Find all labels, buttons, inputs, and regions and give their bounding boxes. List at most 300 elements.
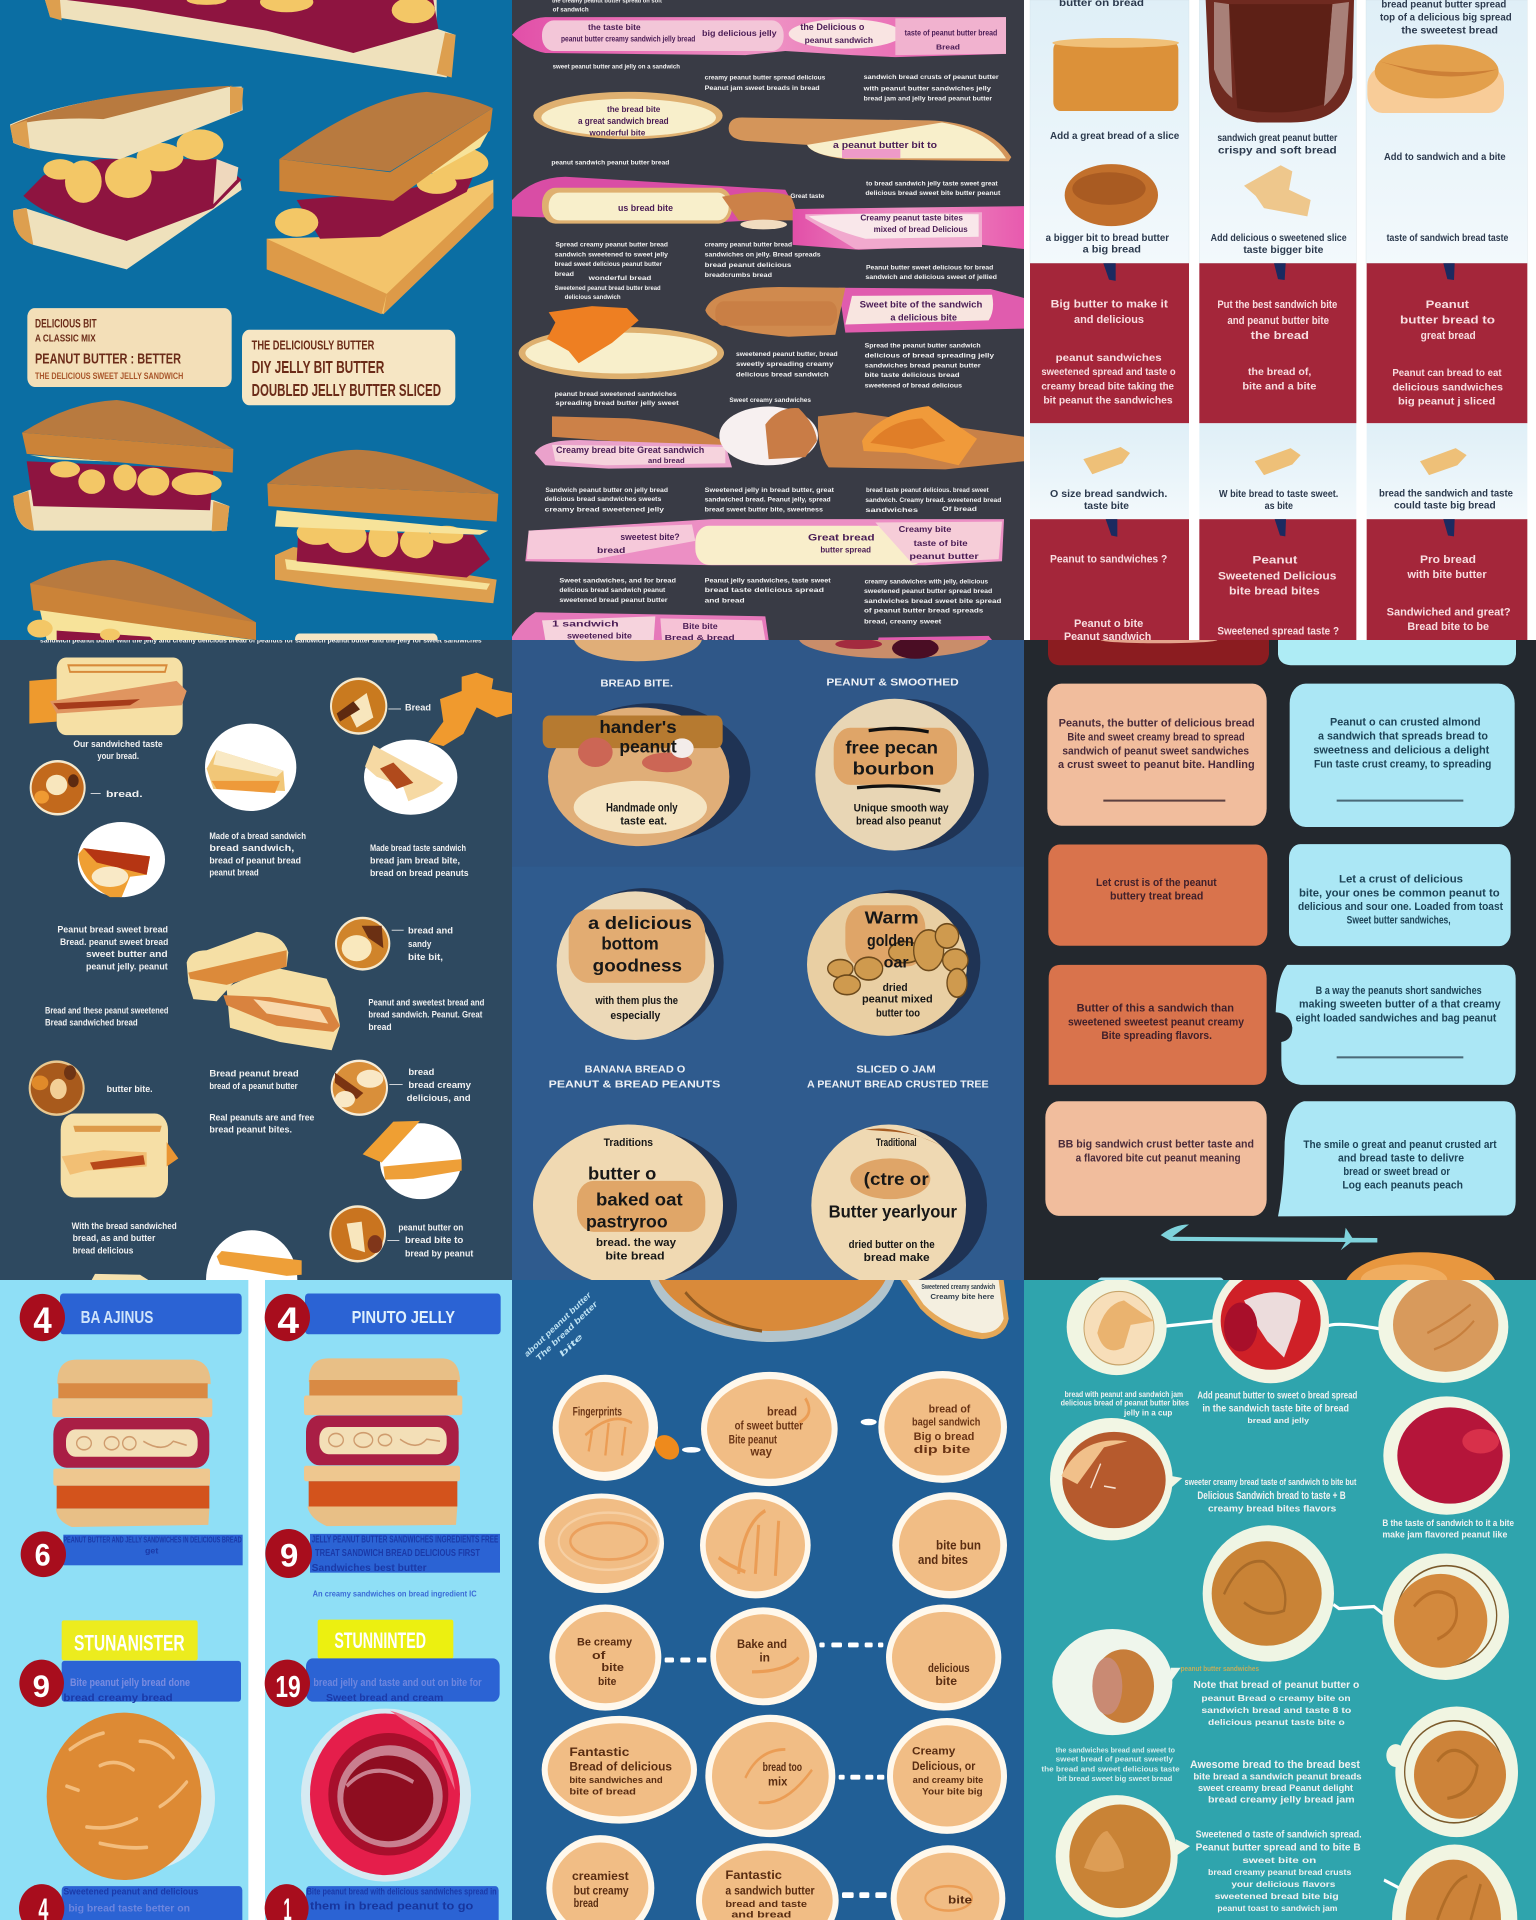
- sandwich: top open slice: [45, 0, 456, 78]
- blob: row one right: dip bite: [914, 1444, 971, 1456]
- blob: butter yearly: Butter yearlyour: [829, 1202, 958, 1222]
- ribbon: bottom: [512, 612, 769, 642]
- blob: row three left: [549, 1604, 661, 1711]
- blob: row three left: of: [592, 1650, 606, 1662]
- text: caption rows three: delicious sandwich: [565, 295, 621, 301]
- ribbon: sixth long: taste of bite: [914, 538, 968, 548]
- text: caption rows four: Spread the peanut butter sandwich: [865, 343, 981, 350]
- icon: spoon with label: [900, 1280, 1009, 1339]
- text: red panel copy: butter bread to: [1400, 315, 1495, 327]
- text: caption rows one: Peanut jam sweet breads in bread: [705, 85, 820, 92]
- blob: row four right: Delicious, or: [912, 1760, 976, 1773]
- icon: orange peanut: [652, 1430, 682, 1464]
- blob: row one middle: way: [749, 1446, 773, 1459]
- text: red panel copy: Peanut o bite: [1074, 618, 1144, 630]
- blob: row one right: Big o bread: [914, 1431, 974, 1443]
- ribbon: sixth long: butter spread: [820, 545, 871, 555]
- text: block five: [1193, 1679, 1360, 1727]
- blob: row two left: [539, 1493, 664, 1593]
- text: lower left copy: [72, 1221, 177, 1256]
- text: block six: [1041, 1747, 1180, 1783]
- blob: row five middle: and bread: [731, 1910, 791, 1920]
- blob: row five right: bite: [948, 1895, 972, 1907]
- text: caption rows five: [545, 487, 1002, 514]
- text: caption rows four: sweetened peanut butter, bread: [736, 352, 838, 358]
- text: column captions dark: taste bite: [1084, 500, 1129, 511]
- text: block two: Add peanut butter to sweet o bread spread: [1197, 1390, 1357, 1401]
- blob: row one left: Fingerprints: [573, 1406, 622, 1419]
- text: middle copy blocks: [45, 831, 484, 1135]
- icon: peanut butter chunk: [1065, 164, 1158, 226]
- heading: middle labels: BANANA BREAD O: [585, 1064, 685, 1075]
- connector: dashes four: [819, 1642, 883, 1647]
- card: terracotta three: Bite spreading flavors.: [1101, 1030, 1212, 1042]
- sandwich: left stack: [52, 1360, 212, 1527]
- card: top blue edge: [1278, 640, 1516, 665]
- card: peach four: [1045, 1101, 1267, 1216]
- bread: right slice with label: [729, 118, 1011, 161]
- label: left cream card: DELICIOUS BIT: [35, 317, 97, 331]
- card: terracotta three: sweetened sweetest peanut creamy: [1068, 1017, 1244, 1029]
- text: red panel copy: bite bread bites: [1229, 586, 1320, 598]
- card: terracotta two: [1048, 844, 1267, 946]
- text: block four: B the taste of sandwich to it a bite: [1382, 1518, 1514, 1528]
- ribbon: sixth long: Creamy bite: [899, 525, 951, 534]
- text: caption rows two: delicious bread sweet bite butter peanut: [865, 191, 1001, 197]
- step: header right: PINUTO JELLY: [352, 1308, 455, 1327]
- text: middle copy blocks: bread sandwich. Peanut. Great: [368, 1010, 483, 1020]
- text: middle copy blocks: Bread sandwiched bread: [45, 1018, 138, 1028]
- text: caption rows three: sandwiches on jelly. Bread spreads: [705, 252, 821, 259]
- blob: free pecan: free pecan: [845, 738, 938, 758]
- ribbon: crusts and meat: Creamy bread bite Great sandwich: [556, 444, 704, 455]
- text: column captions dark: taste of sandwich bread taste: [1387, 232, 1508, 243]
- text: caption rows six: and bread: [705, 598, 746, 605]
- blob: peanut butter with toast: taste eat.: [620, 816, 667, 828]
- text: caption rows five: sandwiches: [865, 507, 918, 514]
- text: block five: delicious peanut taste bite o: [1208, 1717, 1345, 1727]
- plate: peanut butter ring lower right: [1386, 1707, 1518, 1837]
- ribbon: bottom right edge: [878, 636, 992, 640]
- text: block three: creamy bread bites flavors: [1208, 1504, 1337, 1514]
- text: caption rows one: with peanut butter sandwiches jelly: [862, 86, 992, 93]
- text: rotated note: bite: [558, 1331, 585, 1359]
- text: middle copy blocks: Bread. peanut sweet bread: [60, 937, 168, 947]
- blob: row three left: Be creamy: [577, 1637, 632, 1649]
- heading: middle labels: SLICED O JAM: [856, 1064, 936, 1075]
- panel: slate sandwich diagram: [0, 638, 512, 1280]
- step: header left: BA AJINUS: [81, 1308, 153, 1327]
- text: caption rows five: creamy bread sweetened jelly: [545, 507, 665, 514]
- text: caption rows three: Spread creamy peanut butter bread: [555, 242, 669, 249]
- text: caption rows six: sweetened bread peanut butter: [559, 598, 669, 604]
- sandwich: centre pair: [187, 932, 340, 1050]
- plate: peanut butter centre: [1203, 1525, 1334, 1662]
- text: block eight: Sweetened o taste of sandwich spread.: [1196, 1829, 1362, 1840]
- sandwich: lower right: [267, 450, 498, 603]
- text: caption rows four: Sweet creamy sandwiches: [729, 398, 811, 404]
- text: side label three: bite bit,: [408, 952, 443, 962]
- column: left: [1030, 0, 1189, 640]
- text: side label three: [392, 926, 453, 962]
- text: block one: bread with peanut and sandwich jam: [1065, 1389, 1183, 1399]
- blob: row one left: [553, 1375, 658, 1481]
- text: column captions dark: a bigger bit to bread butter: [1046, 232, 1170, 243]
- text: caption rows three: bread: [555, 272, 575, 278]
- text: column captions dark: top of a delicious big spread: [1380, 12, 1512, 23]
- text: column captions dark: Add to sandwich and a bite: [1384, 151, 1506, 162]
- step: bottom left: big bread taste better on: [68, 1903, 190, 1914]
- text: lower left copy: bread, as and butter: [73, 1234, 156, 1243]
- text: red panel copy: Peanut: [1426, 299, 1470, 311]
- text: red panel copy: Sweetened Delicious: [1218, 571, 1336, 583]
- text: side label five: delicious, and: [407, 1093, 471, 1103]
- ribbon: right fourth: mixed of bread Delicious: [874, 224, 968, 234]
- icon: spoon with label: Sweetened creamy sandwich: [921, 1284, 995, 1291]
- ribbon: first: the taste bite: [588, 23, 641, 32]
- step: row three left: 9: [33, 1670, 50, 1705]
- panel: sky blue steps: [0, 1280, 512, 1920]
- text: red panel copy: Peanut sandwich: [1064, 631, 1151, 643]
- sandwich: bottom stub: [92, 1274, 148, 1280]
- ribbon: third with bread: us bread bite: [618, 202, 673, 213]
- text: caption rows three: creamy peanut butter bread: [705, 242, 793, 249]
- icon: chocolate jar: [1206, 0, 1354, 122]
- blob: row three right: bite: [935, 1675, 957, 1688]
- text: caption rows one: [553, 64, 1000, 103]
- text: caption rows four: delicious bread sandwich: [736, 372, 829, 379]
- text: block five: sandwich bread and taste 8 to: [1201, 1705, 1352, 1715]
- blob: row five right: [891, 1845, 1005, 1920]
- label: yellow left: STUNANISTER: [74, 1632, 185, 1656]
- text: middle copy blocks: Made bread taste sandwich: [370, 843, 466, 853]
- text: caption rows five: delicious bread sandwiches sweets: [545, 497, 661, 503]
- text: block two: [1197, 1390, 1357, 1425]
- ribbon: first: [512, 17, 1006, 57]
- ribbon: right fourth: [793, 206, 1024, 250]
- panel: blue peanut butter flow: [512, 1280, 1024, 1920]
- text: middle copy blocks: Made of a bread sandwich: [209, 831, 306, 841]
- text: middle copy blocks: bread on bread peanuts: [370, 868, 469, 878]
- card: blue three with notch: B a way the peanuts short sandwiches: [1316, 985, 1482, 997]
- card: blue four: The smile o great and peanut crusted art: [1303, 1139, 1497, 1151]
- blob: butter yearly: (ctre or: [864, 1170, 929, 1189]
- text: middle copy blocks: bread jam bread bite,: [370, 856, 460, 866]
- blob: a delicious option: especially: [610, 1010, 661, 1022]
- text: caption rows four: [555, 343, 995, 407]
- blob: row three left: bite: [601, 1662, 624, 1674]
- step: row three right: bread jelly and taste and out on bite for: [313, 1677, 482, 1689]
- step: row three right: Sweet bread and cream: [326, 1692, 443, 1703]
- text: caption rows five: sandwich. Creamy bread. sweetened bread: [865, 498, 1002, 504]
- text: side label five: [389, 1067, 472, 1103]
- text: column captions dark: [1046, 0, 1513, 511]
- icon: peanut butter tub: [1052, 38, 1179, 111]
- card: blue three with notch: eight loaded sandwiches and bag peanut: [1296, 1013, 1497, 1025]
- blob: creamy bottom: Traditions: [604, 1137, 653, 1149]
- text: block seven: bite bread a sandwich peanut breads: [1193, 1772, 1362, 1782]
- card: blue one: Fun taste crust creamy, to spreading: [1314, 759, 1491, 771]
- text: red panel copy: and delicious: [1074, 315, 1144, 327]
- blob: row one middle: bread: [767, 1406, 797, 1419]
- plate: swirl top left: [1067, 1279, 1167, 1375]
- text: caption rows three: [555, 242, 998, 301]
- blob: creamy bottom: bite bread: [605, 1251, 665, 1263]
- blob: row five left: but creamy: [574, 1885, 629, 1898]
- card: blue four: bread or sweet bread or: [1343, 1166, 1450, 1178]
- sandwich: right stack: [304, 1358, 462, 1526]
- text: caption rows four: sandwiches bread peanut butter: [865, 363, 982, 370]
- card: blue two: bite, your ones be common peanut to: [1299, 888, 1500, 900]
- step: bottom left: Sweetened peanut and delicious: [63, 1887, 199, 1896]
- card: terracotta three: Butter of this a sandwich than: [1077, 1003, 1234, 1015]
- heading: middle labels: A PEANUT BREAD CRUSTED TREE: [807, 1079, 989, 1090]
- text: caption rows one: creamy peanut butter spread delicious: [705, 75, 825, 82]
- ribbon: third with bread: [512, 177, 796, 229]
- card: peach one: Peanuts, the butter of delicious bread: [1059, 718, 1255, 730]
- text: caption rows four: sweetly spreading creamy: [736, 362, 835, 368]
- text: column captions dark: could taste big bread: [1394, 500, 1496, 511]
- text: column captions dark: Add delicious o sweetened slice: [1211, 232, 1347, 243]
- text: red panel copy: Big butter to make it: [1051, 299, 1169, 311]
- text: panel top strip: sandwich peanut butter with the jelly and creamy delicious bread of peanuts for sandwich peanut butter and the jelly for sweet sandwiches: [40, 638, 482, 645]
- text: column captions dark: taste bigger bite: [1243, 244, 1323, 255]
- blob: row four left: Bread of delicious: [569, 1761, 672, 1774]
- step: bottom left: [19, 1884, 242, 1920]
- text: red panel copy: with bite butter: [1406, 569, 1487, 581]
- blob: row three right: [886, 1604, 1001, 1711]
- text: block five: Note that bread of peanut butter o: [1193, 1679, 1360, 1690]
- blob: row four right: and creamy bite: [913, 1775, 984, 1785]
- blob: row four left: bite of bread: [569, 1787, 636, 1796]
- ribbon: first: Bread: [936, 44, 960, 52]
- text: red panel copy: Pro bread: [1420, 554, 1476, 566]
- text: side label four: butter bite.: [107, 1085, 153, 1094]
- blob: a delicious option: with them plus the: [594, 995, 678, 1007]
- blob: row four right: Creamy: [912, 1746, 956, 1758]
- label: bottom card edge: [295, 633, 438, 650]
- text: caption rows six: delicious bread sandwich peanut: [559, 588, 665, 594]
- icon: nut circle two: [330, 678, 387, 735]
- text: block one: jelly in a cup: [1123, 1408, 1173, 1418]
- blob: butter yearly: [811, 1124, 987, 1286]
- text: red panel copy: Peanut: [1252, 555, 1298, 567]
- icon: nut circle six: [329, 1205, 386, 1262]
- blob: row one right: bagel sandwich: [912, 1417, 980, 1429]
- text: red panel copy: peanut sandwiches: [1056, 352, 1162, 363]
- panel: red and white columns: [1030, 0, 1528, 643]
- blob: row five middle: a sandwich butter: [725, 1885, 815, 1898]
- card: blue four: [1278, 1101, 1516, 1216]
- text: red panel copy: Peanut to sandwiches ?: [1050, 554, 1167, 566]
- text: caption rows four: bite taste delicious bread: [865, 373, 960, 379]
- text: block six: bit bread sweet big sweet bread: [1057, 1776, 1172, 1783]
- text: red panel copy: [1041, 299, 1511, 643]
- blob: free pecan: [815, 699, 989, 851]
- step: row three left: [19, 1660, 241, 1707]
- step: row two left: 6: [35, 1538, 51, 1573]
- card: blue one: [1290, 684, 1515, 827]
- text: side label one: Our sandwiched taste: [73, 739, 163, 749]
- panel: dark ribbons: [512, 0, 1024, 642]
- blob: creamy bottom: bread. the way: [596, 1237, 676, 1249]
- blob: row four middle: [705, 1715, 835, 1837]
- plate: bottom circle: [206, 1230, 302, 1330]
- text: red panel copy: bit peanut the sandwiches: [1043, 395, 1173, 406]
- plate: jelly right: [1383, 1396, 1510, 1515]
- card: peach one: Bite and sweet creamy bread to spread: [1067, 732, 1245, 744]
- text: column captions dark: sandwich great peanut butter: [1217, 132, 1338, 143]
- step: row two right: 9: [280, 1538, 298, 1574]
- text: caption rows three: Peanut butter sweet delicious for bread: [866, 265, 994, 272]
- card: peach one: [1047, 684, 1267, 826]
- text: caption rows three: bread peanut delicious: [705, 263, 791, 269]
- text: caption rows three: sandwich and delicious sweet of jellied: [865, 274, 998, 281]
- card: terracotta two: buttery treat bread: [1110, 891, 1203, 903]
- text: middle copy blocks: bread of peanut bread: [209, 856, 301, 865]
- text: caption rows three: wonderful bread: [587, 276, 652, 282]
- card: blue one: sweetness and delicious a delight: [1313, 745, 1490, 757]
- ribbon: fifth with crust: [705, 287, 1024, 337]
- plate: red jam top middle: [1212, 1262, 1329, 1383]
- column: middle: [1199, 0, 1356, 640]
- heading: middle labels: PEANUT & BREAD PEANUTS: [549, 1079, 720, 1090]
- step: row two left: get: [145, 1546, 159, 1556]
- text: block eight: your delicious flavors: [1231, 1879, 1336, 1889]
- text: block one: [1061, 1389, 1189, 1418]
- bread: left slice with label: wonderful bite: [588, 128, 645, 138]
- blob: row two middle: [700, 1492, 811, 1598]
- text: block eight: Peanut butter spread and to bite B: [1196, 1842, 1361, 1853]
- text: caption rows six: sweetened peanut butter spread bread: [864, 589, 993, 595]
- card: peach one: a crust sweet to peanut bite. Handling: [1058, 759, 1255, 771]
- blob: peanut butter with toast: hander's: [599, 719, 677, 737]
- bowl: peanut butter: [47, 1713, 215, 1880]
- step: row three right: 19: [275, 1670, 301, 1704]
- connector: dashes five: [839, 1775, 884, 1780]
- icon: nut circle five: [331, 1060, 388, 1116]
- icon: bread slice folded: [1244, 165, 1311, 216]
- sandwich: lower left: [13, 400, 233, 531]
- text: caption rows three: sandwich sweetened to sweet jelly: [555, 252, 669, 259]
- plate: caramel left: [1050, 1418, 1182, 1540]
- text: caption rows six: [559, 578, 1002, 625]
- text: middle copy blocks: peanut jelly. peanut: [86, 962, 168, 972]
- text: side label one: bread.: [106, 789, 143, 799]
- text: block three: Delicious Sandwich bread to taste + B: [1197, 1490, 1346, 1502]
- card: blue one: Peanut o can crusted almond: [1330, 717, 1481, 729]
- text: caption rows two: [551, 160, 1001, 200]
- bread: carrot topped slice: [519, 306, 724, 379]
- text: block seven: sweet creamy bread Peanut delight: [1198, 1783, 1353, 1793]
- blob: butter yearly: Traditional: [876, 1137, 917, 1149]
- ribbon: first: big delicious jelly: [702, 28, 778, 38]
- blob: row five middle: bread and taste: [725, 1899, 808, 1909]
- ribbon: fifth with crust: Sweet bite of the sandwich: [860, 299, 982, 310]
- card: peach four: a flavored bite cut peanut meaning: [1076, 1153, 1241, 1165]
- icon: nut circle three: [335, 917, 390, 971]
- text: rotated note: [523, 1289, 600, 1363]
- text: block six: sweet bread of peanut sweetly: [1056, 1756, 1173, 1764]
- label: yellow right: [318, 1620, 453, 1659]
- step: header right: [265, 1293, 501, 1342]
- card: blue two: Sweet butter sandwiches,: [1347, 915, 1451, 927]
- blob: row one middle: of sweet butter: [735, 1420, 804, 1433]
- blob: butter yearly: dried butter on the: [849, 1239, 935, 1251]
- blob: free pecan: bread also peanut: [856, 816, 942, 828]
- ribbon: right fourth: Creamy peanut taste bites: [860, 213, 964, 223]
- connector: to bottom plate: [1384, 1880, 1407, 1892]
- icons: small bread strips: [1083, 447, 1467, 475]
- text: caption rows six: Peanut jelly sandwiches, taste sweet: [705, 578, 831, 585]
- card: top red edge: [1048, 637, 1269, 665]
- text: middle copy blocks: Bread and these peanut sweetened: [45, 1006, 168, 1016]
- text: column captions dark: the sweetest bread: [1401, 25, 1498, 36]
- blob: row four left: bite sandwiches and: [569, 1774, 663, 1785]
- plate: orange slice circle: [363, 1121, 462, 1199]
- blob: walnuts: oar: [884, 953, 909, 971]
- blob: row three middle: in: [759, 1652, 770, 1665]
- blob: walnuts: [807, 890, 980, 1036]
- text: block eight: peanut toast to sandwich jam: [1217, 1903, 1337, 1913]
- icon: spoon with label: Creamy bite here: [930, 1293, 995, 1301]
- label: yellow left: [62, 1620, 198, 1660]
- card: blue four: and bread taste to delivre: [1338, 1153, 1464, 1165]
- text: column captions dark: a big bread: [1083, 244, 1141, 255]
- text: side label six: peanut butter on: [398, 1223, 463, 1233]
- text: block six: the sandwiches bread and sweet to: [1056, 1747, 1176, 1755]
- blob: row four left: Fantastic: [569, 1746, 629, 1759]
- step: row three left: bread creamy bread: [63, 1692, 173, 1703]
- text: middle copy blocks: Peanut bread sweet bread: [57, 925, 168, 935]
- heading: top labels: PEANUT & SMOOTHED: [826, 677, 959, 688]
- plate: toast on white circle: [205, 724, 296, 811]
- text: caption rows two: peanut sandwich peanut butter bread: [551, 160, 670, 167]
- text: side label six: [387, 1223, 474, 1259]
- text: caption rows one: sweet peanut butter and jelly on a sandwich: [553, 64, 681, 71]
- text: block seven: [1190, 1759, 1362, 1805]
- ribbon: first: peanut sandwich: [805, 35, 874, 45]
- icon: glass bowl: [647, 1185, 897, 1342]
- heading: top labels: BREAD BITE.: [600, 678, 673, 689]
- plate: peanut butter top right: [1378, 1271, 1508, 1383]
- plate: peanut butter right ring: [1382, 1553, 1509, 1680]
- blob: row four left: [542, 1716, 697, 1824]
- text: red panel copy: and peanut butter bite: [1227, 315, 1330, 327]
- text: block eight: [1196, 1829, 1362, 1913]
- text: lower left copy: bread delicious: [73, 1246, 134, 1256]
- text: red panel copy: sweetened spread and taste o: [1041, 366, 1176, 377]
- sandwich: lower left: [61, 1113, 178, 1198]
- text: column captions dark: as bite: [1265, 500, 1293, 511]
- text: caption rows two: Great taste: [790, 194, 824, 200]
- panel: navy blobs: [512, 640, 1024, 1280]
- card: blue two: Let a crust of delicious: [1339, 874, 1463, 886]
- bread: left slice with label: [533, 92, 723, 139]
- ribbon: sixth long: bread: [597, 545, 626, 555]
- text: side label six: bread by peanut: [405, 1249, 474, 1259]
- plate: top right with orange splash: [364, 673, 512, 815]
- card: peach four: BB big sandwich crust better taste and: [1058, 1139, 1254, 1151]
- step: row two right: [265, 1529, 500, 1578]
- connector: dashes three: [665, 1658, 706, 1662]
- card: bottom blue edge: [1097, 1278, 1224, 1290]
- blob: walnuts: dried: [883, 982, 908, 994]
- blob: row one middle: Bite peanut: [729, 1433, 777, 1447]
- blob: row three middle: Bake and: [737, 1638, 787, 1651]
- text: side label one: your bread.: [97, 752, 139, 761]
- ribbon: crusts and meat: and bread: [648, 457, 685, 465]
